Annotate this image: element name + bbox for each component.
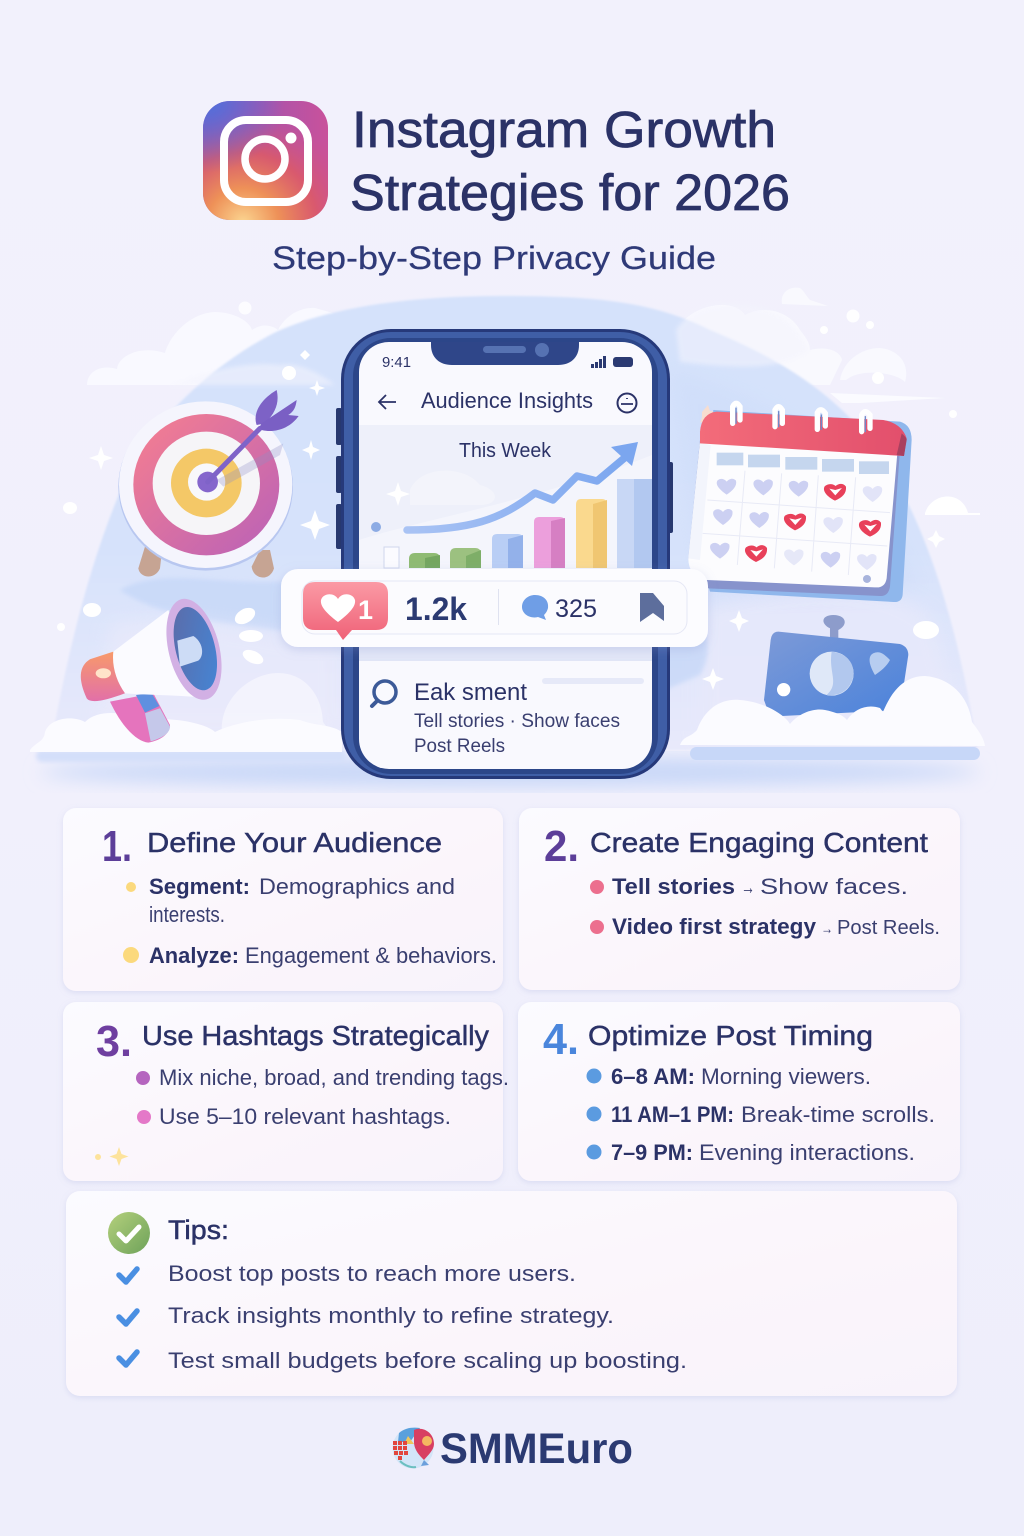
card 4: optimize post timing: 6–8 AM: [611, 1064, 695, 1089]
phone: This Week [459, 440, 552, 462]
notch [431, 342, 579, 365]
calendar [688, 403, 912, 602]
card 1: define your audience [63, 808, 503, 991]
like badge [303, 582, 388, 640]
like badge: 1 [358, 595, 373, 625]
card 2: create engaging content: Show faces. [760, 874, 908, 899]
card 4: optimize post timing: 7–9 PM: [611, 1140, 693, 1165]
band under stats [359, 647, 652, 661]
card 4: optimize post timing [518, 1002, 960, 1181]
stats card [281, 569, 708, 647]
card 4: optimize post timing: Evening interactions. [699, 1140, 915, 1165]
foreground clouds right [680, 676, 985, 746]
card 2: create engaging content: Post Reels. [837, 917, 940, 939]
target with arrow [118, 390, 299, 578]
screen header [379, 395, 396, 409]
logo: SMMEuro: SMMEuro [440, 1425, 633, 1473]
card 2: create engaging content: → [821, 919, 833, 938]
subtitle: Step-by-Step Privacy Guide [272, 240, 716, 276]
card 4: optimize post timing: Morning viewers. [701, 1064, 871, 1089]
translucent cloud bands on dome [170, 305, 810, 385]
phone [336, 329, 673, 779]
screen lower panel [372, 678, 644, 757]
card 3: use hashtags strategically: Use 5–10 relevant hashtags. [159, 1104, 451, 1129]
card 4: optimize post timing: Break-time scrolls. [741, 1102, 935, 1127]
phone side buttons [336, 408, 673, 549]
panel: tips: Track insights monthly to refine strategy. [168, 1303, 614, 1328]
small right cloud [925, 496, 980, 515]
card 3: use hashtags strategically [63, 1002, 509, 1181]
screen lower panel: Tell stories · Show faces [414, 711, 620, 732]
screen lower panel: Post Reels [414, 736, 505, 757]
card 1: define your audience: Define Your Audience [147, 827, 442, 858]
panel: tips: Test small budgets before scaling up boosting. [168, 1348, 687, 1373]
icon: globe with pin [392, 1428, 434, 1468]
card 2: create engaging content: → [741, 877, 755, 899]
stats card: 1.2k [405, 591, 467, 627]
foreground clouds left [30, 673, 342, 752]
status bar: 9:41 [382, 355, 411, 371]
title: Instagram Growth [352, 101, 776, 158]
camera [764, 615, 908, 717]
card 3: use hashtags strategically: Mix niche, broad, and trending tags. [159, 1065, 509, 1090]
sparkles [95, 1147, 128, 1166]
top clouds behind dome [87, 288, 906, 385]
card 4: optimize post timing: 11 AM–1 PM: [611, 1102, 734, 1127]
panel: tips: Tips: [168, 1215, 229, 1245]
stats card: 325 [555, 595, 597, 623]
card 4: optimize post timing: 4. [543, 1015, 579, 1064]
card 2: create engaging content [519, 808, 960, 990]
bottom haze [40, 757, 980, 787]
card 1: define your audience: Engagement & behaviors. [245, 943, 497, 968]
panel: tips: Boost top posts to reach more users. [168, 1261, 576, 1286]
card 1: define your audience: Demographics and [259, 874, 455, 899]
card 2: create engaging content: 2. [544, 822, 579, 871]
panel: tips [66, 1191, 957, 1396]
icon: green check badge [108, 1212, 150, 1254]
icon: Instagram logo [203, 101, 328, 220]
card 3: use hashtags strategically: 3. [96, 1017, 132, 1066]
megaphone [81, 593, 231, 743]
card 1: define your audience: 1. [102, 822, 132, 871]
title: Strategies for 2026 [350, 164, 790, 221]
phone: Audience Insights [421, 388, 593, 413]
card 3: use hashtags strategically: Use Hashtags Strategically [142, 1020, 489, 1051]
screen lower panel: Eak sment [414, 679, 527, 706]
card 2: create engaging content: Create Engaging Content [590, 827, 928, 858]
chart area [359, 425, 652, 660]
sparkles and dots [57, 302, 957, 690]
title [350, 101, 790, 221]
card 2: create engaging content: Tell stories [612, 874, 735, 899]
hero illustration [30, 288, 985, 787]
card 1: define your audience: Analyze: [149, 943, 239, 968]
hero backdrop: sky dome and clouds [30, 288, 980, 787]
card 4: optimize post timing: Optimize Post Timing [588, 1020, 873, 1051]
bar chart [371, 479, 652, 568]
card 2: create engaging content: Video first strategy [612, 914, 817, 939]
card 1: define your audience: Segment: [149, 874, 250, 899]
card 1: define your audience: interests. [149, 902, 225, 927]
trend arrow [407, 442, 638, 530]
